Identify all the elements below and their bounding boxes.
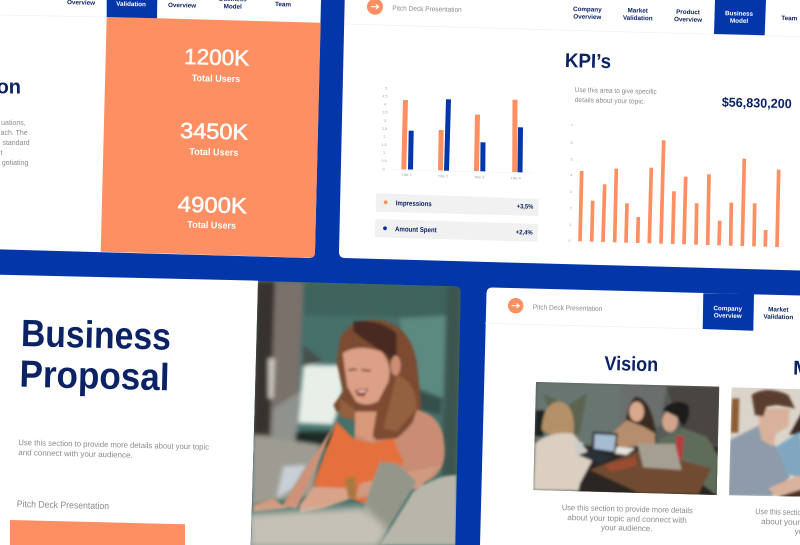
heading: Vision: Vision <box>604 353 658 376</box>
body text fragment: t <box>1 150 3 157</box>
stat: 1200K: Total Users <box>192 73 240 85</box>
stat: 4900K: Total Users <box>187 220 236 232</box>
bar chart: monthly values: 7 <box>571 124 573 128</box>
description <box>575 87 657 106</box>
legend row: impressions: Impressions <box>396 200 432 208</box>
photo: woman on sofa <box>247 278 467 545</box>
bar chart: monthly values <box>568 124 779 247</box>
stat: 1200K: 1200K <box>184 44 250 71</box>
title: Business Proposal: Business <box>20 313 171 359</box>
stat: 4900K: 4900K <box>178 192 248 218</box>
description: Use this area to give specific <box>575 87 657 96</box>
title: Business Proposal: Proposal <box>19 354 170 399</box>
bar chart: impressions vs amount spent: 2.5 <box>382 127 387 131</box>
description <box>18 438 209 460</box>
total value: $56,830,200 <box>722 95 792 111</box>
bar chart: impressions vs amount spent: 1 <box>383 151 385 155</box>
navigation tabs: Market <box>627 7 649 15</box>
navigation tabs: Team <box>781 15 798 22</box>
legend row: impressions: +3,5% <box>517 203 534 211</box>
navigation tabs <box>573 0 798 35</box>
orange stats block <box>101 17 321 258</box>
header label: Pitch Deck Presentation <box>533 304 603 313</box>
stat: 3450K <box>180 118 249 159</box>
bar chart: monthly values: 2 <box>570 206 572 210</box>
navigation tabs: Company <box>713 305 743 313</box>
bar chart: impressions vs amount spent: 3 <box>384 119 386 123</box>
caption: vision: your audience. <box>601 523 652 533</box>
description: and connect with your audience. <box>18 448 133 460</box>
bar chart: impressions vs amount spent: Title 1 <box>402 173 412 177</box>
panel: KPI slide <box>339 0 800 270</box>
header label: Pitch Deck Presentation <box>392 5 462 14</box>
bar chart: monthly values: 1 <box>569 223 571 227</box>
navigation tabs <box>67 0 292 18</box>
icon: arrow badge <box>367 0 383 15</box>
bar chart: impressions vs amount spent: Title 4 <box>511 177 521 181</box>
stat: 3450K: 3450K <box>180 118 249 145</box>
body text fragment: standard <box>2 140 30 147</box>
navigation tabs <box>703 293 793 331</box>
navigation tabs: Validation <box>623 15 653 22</box>
stat: 1200K <box>184 44 250 85</box>
legend row: impressions <box>376 193 539 216</box>
caption: vision: Use this section to provide more details <box>562 503 693 515</box>
description: Use this section to provide more details about your topic <box>18 438 209 452</box>
bar chart: monthly values: 4 <box>570 174 572 178</box>
icon: arrow badge <box>508 298 523 313</box>
bar chart: impressions vs amount spent: 1.5 <box>381 143 387 147</box>
description: details about your topic. <box>575 97 645 106</box>
navigation tabs: Model <box>730 18 748 25</box>
caption: vision <box>562 503 693 533</box>
photo: colleagues at work <box>727 387 800 498</box>
navigation tabs: Model <box>224 3 242 11</box>
panel: market validation slide <box>0 0 321 258</box>
navigation tabs: Business <box>725 10 754 18</box>
bar chart: impressions vs amount spent: 4.5 <box>382 94 388 98</box>
caption: mission fragment <box>755 507 800 536</box>
body text fragment: gotiating <box>2 160 28 167</box>
panel: title slide <box>0 275 258 545</box>
caption: vision: about your topic and connect with <box>567 513 687 525</box>
navigation tabs: Team <box>275 1 292 9</box>
body text fragment: uations, <box>1 120 26 127</box>
photo: team around laptops <box>530 380 723 497</box>
bar chart: impressions vs amount spent: 2 <box>383 135 386 139</box>
bar chart: impressions vs amount spent: 5 <box>385 86 387 90</box>
bar chart: impressions vs amount spent: 0 <box>382 168 385 172</box>
navigation tabs: Overview <box>674 16 702 24</box>
navigation tabs: Market <box>768 306 789 314</box>
legend row: amount spent: +2,4% <box>516 229 533 237</box>
navigation tabs: Overview <box>168 2 196 10</box>
caption: mission fragment: about your <box>761 517 800 527</box>
orange block <box>10 520 185 545</box>
bar chart: impressions vs amount spent <box>381 86 532 181</box>
navigation tabs: Overview <box>714 312 742 320</box>
navigation tabs: Overview <box>573 13 602 21</box>
body text fragment <box>1 120 30 167</box>
bar chart: impressions vs amount spent: 4 <box>384 102 386 106</box>
heading: KPI's: KPI’s <box>565 50 611 73</box>
bar chart: impressions vs amount spent: Title 3 <box>474 175 484 179</box>
navigation tabs: Validation <box>763 314 793 321</box>
subtitle: Pitch Deck Presentation <box>17 499 109 512</box>
title: Business Proposal <box>19 313 171 399</box>
panel: vision and mission slide <box>480 288 800 545</box>
legend row: amount spent: Amount Spent <box>395 226 437 234</box>
bar chart: monthly values: 6 <box>570 141 573 145</box>
bar chart: impressions vs amount spent: Title 2 <box>438 174 448 178</box>
body text fragment: ach. The <box>1 130 28 137</box>
bar chart: impressions vs amount spent: 0.5 <box>381 159 387 163</box>
stat: 4900K <box>178 192 248 232</box>
bar chart: monthly values: 0 <box>568 239 571 243</box>
bar chart: impressions vs amount spent: 3.5 <box>382 110 388 114</box>
legend row: amount spent <box>375 219 538 242</box>
navigation tabs: Product <box>676 9 701 16</box>
bar chart: monthly values: 3 <box>570 190 572 194</box>
bar chart: monthly values: 5 <box>570 158 573 162</box>
navigation tabs: Validation <box>116 1 146 8</box>
navigation tabs: Company <box>573 6 602 14</box>
stat: 3450K: Total Users <box>189 147 238 159</box>
